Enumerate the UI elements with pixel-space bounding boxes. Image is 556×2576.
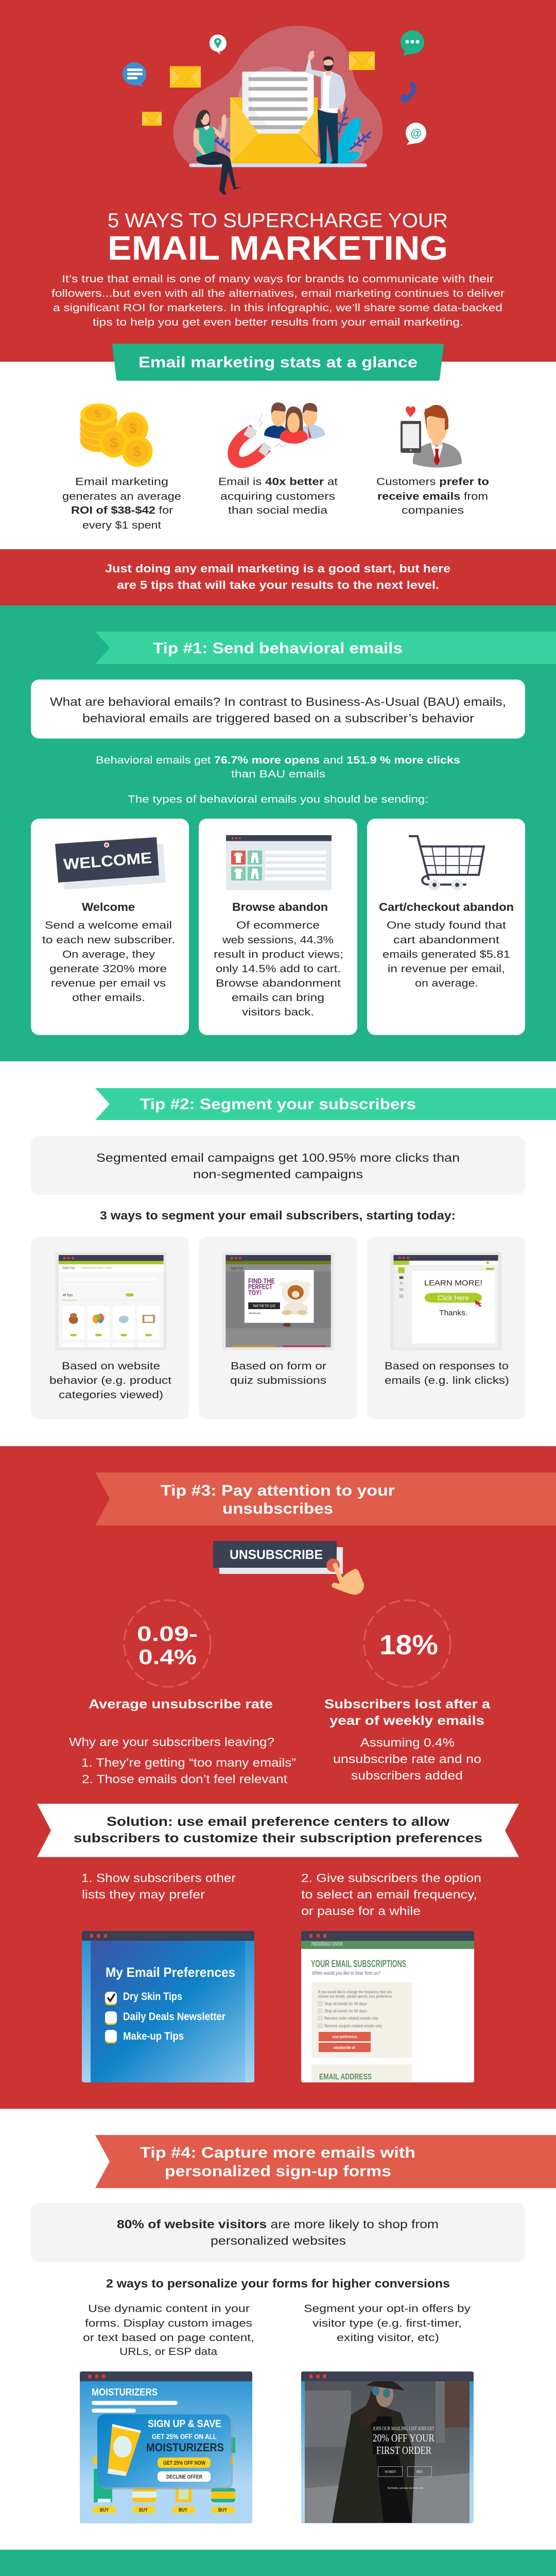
stat: prefer emails text: Customers prefer to	[376, 476, 489, 487]
checkbox: daily deals newsletter	[105, 2011, 225, 2025]
screenshot: quiz popup: Digioh Toys	[231, 1267, 243, 1270]
screenshot: fashion signup popup: WOMEN	[385, 2470, 396, 2474]
callout: what are behavioral emails	[31, 680, 525, 739]
text: dynamic content: or text based on page content,	[83, 2332, 254, 2344]
subheading: types of behavioral emails: The types of behavioral emails you should be sending:	[128, 794, 428, 805]
card body: web sessions, 44.3%	[222, 935, 334, 946]
callout: website visitors stat	[31, 2203, 525, 2262]
caption: quiz submissions	[230, 1375, 326, 1386]
stat: prefer emails text	[376, 476, 489, 516]
callout: segmented campaigns stat: Segmented email campaigns get 100.95% more clicks than	[96, 1151, 460, 1164]
stat: prefer emails text: companies	[402, 505, 464, 516]
text: segment opt-in offers: exiting visitor, etc)	[337, 2332, 439, 2344]
intro paragraph: tips to help you get even better results from your email marketing.	[93, 316, 463, 328]
icon: at-sign bubble: @	[410, 127, 422, 140]
card body: On average, they	[62, 949, 155, 960]
text: dynamic content	[83, 2303, 254, 2358]
card body: One study found that	[387, 920, 507, 931]
checkbox: dry skin tips	[105, 1991, 182, 2005]
text: segment opt-in offers	[304, 2303, 471, 2344]
panel: tip 3 background	[0, 1446, 556, 2109]
intro paragraph: It’s true that email is one of many ways for brands to communicate with their	[62, 273, 494, 285]
stat: ROI text: ROI of $38-$42 for	[71, 505, 173, 516]
icon: shopping cart	[409, 836, 484, 890]
ribbon: tip 3 heading: unsubscribes	[222, 1500, 333, 1517]
screenshot: moisturizers signup popup: MOISTURIZERS	[146, 2441, 224, 2454]
screenshot: your email subscriptions window: PREFERENCE CENTER	[311, 1941, 343, 1946]
icon: small envelope	[142, 112, 162, 126]
screenshot: moisturizers signup popup: MOISTURIZERS	[92, 2387, 158, 2398]
text: option 1	[81, 1871, 236, 1901]
stat label: subscribers lost: year of weekly emails	[329, 1714, 484, 1728]
caption: Based on form or	[231, 1361, 326, 1372]
card: cart/checkout abandon	[367, 819, 525, 1035]
panel: tip 1 background	[0, 605, 556, 1061]
screenshot: quiz popup	[222, 1252, 334, 1350]
screenshot: your email subscriptions window: Receive order related emails only	[324, 2015, 379, 2021]
ribbon: tip 1 heading: Tip #1: Send behavioral emails	[153, 640, 403, 657]
stat: 40x better text	[218, 476, 338, 516]
callout: segmented campaigns stat	[31, 1136, 525, 1195]
panel: stats background	[0, 362, 556, 549]
card body: in revenue per email,	[388, 963, 505, 975]
icon: blue chat bubble	[123, 62, 146, 87]
caption: emails (e.g. link clicks)	[385, 1375, 509, 1386]
heading tab: stats at a glance	[112, 344, 444, 381]
stat: 0.09-0.4% dashed circle: 0.4%	[138, 1645, 197, 1669]
icon: welcome sign	[55, 837, 166, 890]
intro paragraph: a significant ROI for marketers. In this infographic, we’ll share some data-backed	[53, 302, 502, 314]
card: email responses	[367, 1236, 525, 1419]
stat: ROI text	[62, 476, 181, 531]
stat: 40x better text: acquiring customers	[220, 491, 335, 502]
callout: website visitors stat: 80% of website visitors are more likely to shop from	[117, 2217, 439, 2231]
icon: location bubble	[210, 35, 227, 55]
subheading: 3 ways to segment: 3 ways to segment your email subscribers, starting today:	[100, 1209, 456, 1222]
card body: Send a welcome email	[45, 920, 172, 931]
icon: envelope top right	[349, 52, 375, 70]
icon: welcome sign: WELCOME	[63, 850, 152, 873]
screenshot: your email subscriptions window: receive our emails, please specify your preference.	[318, 1994, 393, 1999]
text: why subscribers leave: Why are your subscribers leaving?	[69, 1735, 274, 1749]
card: form or quiz submissions	[199, 1236, 357, 1419]
caption	[230, 1361, 326, 1386]
card title: Browse abandon	[232, 901, 328, 913]
stat: prefer emails text: receive emails from	[377, 491, 488, 502]
screenshot: moisturizers signup popup: SIGN UP & SAVE	[148, 2418, 221, 2430]
stat label: subscribers lost: Subscribers lost after a	[324, 1697, 491, 1711]
text: dynamic content: forms. Display custom images	[85, 2318, 252, 2329]
icon: gold coins: $	[93, 408, 103, 420]
stat: 0.09-0.4% dashed circle: 0.09-	[137, 1622, 198, 1646]
screenshot: your email subscriptions window: unsubscribe all	[334, 2045, 355, 2050]
screenshot: fashion signup popup: 20% OFF YOUR	[373, 2432, 435, 2444]
caption: behavior (e.g. product	[49, 1375, 172, 1386]
card: website behavior	[31, 1236, 189, 1419]
screenshot: fashion signup popup: JOIN OUR MAILING LIST AND GET	[373, 2426, 435, 2432]
stat: ROI text: every $1 spent	[82, 520, 162, 531]
screenshot: fashion signup popup: FIRST ORDER	[376, 2444, 431, 2456]
stat: ROI text: generates an average	[62, 491, 181, 502]
stat label: average unsubscribe rate: Average unsubscribe rate	[89, 1697, 273, 1711]
text: assumption	[333, 1736, 481, 1782]
ribbon: tip 4 heading: personalized sign-up forms	[165, 2163, 391, 2180]
screenshot: email with click button	[390, 1252, 501, 1350]
checkbox: make-up tips: Make-up Tips	[123, 2030, 184, 2042]
ribbon: tip 3 heading: Tip #3: Pay attention to your	[161, 1482, 395, 1499]
screenshot: your email subscriptions window: Stop all sends for 60 days	[324, 2008, 367, 2013]
stat: 40x better text: than social media	[228, 505, 328, 516]
card title: Cart/checkout abandon	[379, 901, 514, 913]
heading tab: stats at a glance: Email marketing stats at a glance	[138, 354, 418, 371]
panel: tip 5 background	[0, 2550, 556, 2576]
checkbox: dry skin tips: Dry Skin Tips	[123, 1991, 182, 2003]
screenshot: my email preferences window	[82, 1931, 254, 2082]
intro paragraph	[51, 273, 505, 328]
subheading: 2 ways to personalize: 2 ways to personalize your forms for higher conversions	[106, 2277, 450, 2290]
stat: 18% dashed circle	[364, 1600, 450, 1687]
card body: emails can bring	[232, 992, 324, 1004]
text: assumption: Assuming 0.4%	[360, 1736, 455, 1749]
screenshot: fashion signup popup	[301, 2371, 474, 2523]
screenshot: moisturizers signup popup: BUY	[179, 2507, 187, 2513]
icon: man with phone and heart	[401, 405, 462, 468]
caption: Based on website	[62, 1361, 160, 1372]
card body: on average.	[415, 978, 478, 989]
icon: gold coins: $	[133, 444, 141, 460]
text: dynamic content: URLs, or ESP data	[119, 2346, 218, 2358]
banner: solution	[37, 1804, 519, 1857]
screenshot: your email subscriptions window: If you would like to change the frequency that you	[318, 1989, 392, 1994]
card body	[214, 920, 343, 1018]
card body: Browse abandonment	[216, 978, 341, 989]
screenshot: quiz popup: TOY!	[248, 1288, 262, 1296]
screenshot: my email preferences window: My Email Preferences	[106, 1964, 235, 1980]
ribbon: tip 2 heading	[95, 1088, 556, 1120]
screenshot: your email subscriptions window: When would you like to hear from us?	[312, 1971, 380, 1976]
card body: revenue per email vs	[51, 978, 166, 989]
screenshot: moisturizers signup popup: BUY	[100, 2507, 109, 2513]
card body: Of ecommerce	[236, 920, 320, 931]
icon: gold coins	[80, 403, 152, 467]
checkbox: daily deals newsletter: Daily Deals Newsletter	[123, 2011, 225, 2023]
card body	[383, 920, 510, 989]
card title: Welcome	[82, 901, 135, 913]
icon: at-sign bubble	[406, 123, 426, 145]
ribbon: tip 1 heading	[95, 632, 556, 664]
icon: unsubscribe button with hand	[213, 1541, 364, 1595]
callout: website visitors stat: personalized websites	[211, 2234, 346, 2247]
panel: hero background	[0, 0, 556, 362]
screenshot: quiz popup: FIND THE	[248, 1277, 275, 1285]
icon: telephone	[401, 81, 416, 103]
screenshot: moisturizers signup popup: DECLINE OFFER	[166, 2474, 202, 2480]
screenshot: toy store page: All Toys	[63, 1294, 73, 1297]
callout: what are behavioral emails: What are behavioral emails? In contrast to Business-As-Usual (BAU) emails,	[50, 695, 506, 708]
checkbox: make-up tips	[105, 2030, 184, 2043]
icon: magnet attracting people	[233, 402, 325, 463]
title: EMAIL MARKETING	[108, 229, 448, 267]
icon: gold coins: $	[110, 435, 118, 451]
ribbon: tip 4 heading	[95, 2135, 556, 2188]
screenshot: quiz popup: PERFECT	[248, 1282, 272, 1291]
card: browse abandon	[199, 819, 357, 1035]
screenshot: email with click button: Click Here	[438, 1294, 469, 1302]
screenshot: your email subscriptions window: YOUR EMAIL SUBSCRIPTIONS	[311, 1959, 406, 1970]
caption: categories viewed)	[59, 1389, 163, 1401]
text: why subscribers leave	[69, 1735, 296, 1786]
text: assumption: unsubscribe rate and no	[333, 1752, 481, 1766]
text: segment opt-in offers: visitor type (e.g. first-timer,	[312, 2318, 462, 2329]
screenshot: your email subscriptions window: EMAIL ADDRESS	[319, 2073, 372, 2081]
screenshot: your email subscriptions window: save preferences	[332, 2035, 357, 2039]
screenshot: toy store page: Catalog Delivery About Contact	[81, 1267, 112, 1269]
ribbon: tip 4 heading: Tip #4: Capture more emails with	[140, 2144, 415, 2161]
card body: generate 320% more	[49, 963, 167, 975]
stat: 0.09-0.4% dashed circle	[124, 1600, 211, 1687]
screenshot: moisturizers signup popup: GET 25% OFF ON ALL	[152, 2432, 217, 2441]
stat: ROI text: Email marketing	[75, 476, 168, 487]
screenshot: fashion signup popup: No thanks, just take me to the site.	[388, 2487, 424, 2490]
card body: visitors back.	[242, 1007, 314, 1018]
card body: only 14.5% add to cart.	[216, 963, 341, 975]
text: option 2: or pause for a while	[301, 1904, 421, 1918]
ribbon: tip 2 heading: Tip #2: Segment your subscribers	[140, 1096, 416, 1113]
screenshot: moisturizers signup popup: GET 25% OFF NOW	[163, 2460, 205, 2466]
card: welcome	[31, 819, 189, 1035]
card body	[42, 920, 175, 1004]
icon: unsubscribe button with hand: UNSUBSCRIBE	[230, 1548, 323, 1562]
stat text: opens and clicks: than BAU emails	[231, 769, 325, 780]
icon: envelope left	[170, 66, 201, 88]
card body: result in product views;	[214, 949, 343, 960]
screenshot: email with click button: Thanks.	[439, 1309, 467, 1317]
text: option 2: 2. Give subscribers the option	[301, 1871, 481, 1885]
stat label: subscribers lost	[324, 1697, 491, 1728]
text: why subscribers leave: 1. They’re getting “too many emails”	[81, 1756, 296, 1769]
screenshot: moisturizers signup popup	[80, 2371, 252, 2523]
stat text: opens and clicks: Behavioral emails get 76.7% more opens and 151.9 % more clicks	[96, 755, 460, 766]
text: option 1: 1. Show subscribers other	[81, 1871, 236, 1885]
panel: transition strip	[0, 549, 556, 605]
callout: segmented campaigns stat: non-segmented campaigns	[193, 1167, 363, 1181]
text: option 1: lists they may prefer	[82, 1888, 205, 1901]
banner: solution: Solution: use email preference centers to allow	[107, 1815, 450, 1829]
text: option 2: to select an email frequency,	[301, 1888, 477, 1901]
screenshot: toy store page: Digioh Toys	[63, 1266, 76, 1270]
screenshot: quiz popup: TAKE THE TOY QUIZ	[253, 1304, 275, 1308]
banner: solution: subscribers to customize their subscription preferences	[74, 1831, 482, 1845]
screenshot: your email subscriptions window: Receive coupon related emails only	[324, 2023, 383, 2028]
text: assumption: subscribers added	[351, 1769, 463, 1782]
title	[108, 210, 448, 267]
ribbon: tip 3 heading	[95, 1472, 556, 1526]
screenshot: quiz popup: Skip this quiz	[249, 1312, 260, 1314]
screenshot: fashion signup popup: MEN	[416, 2470, 423, 2474]
screenshot: your email subscriptions window	[301, 1931, 474, 2082]
screenshot: moisturizers signup popup: BUY	[139, 2507, 148, 2513]
stat text: opens and clicks	[96, 755, 460, 780]
panel: transition strip: Just doing any email marketing is a good start, but here	[105, 562, 450, 575]
illustration: hero email scene	[173, 26, 383, 194]
text: option 2	[301, 1871, 481, 1918]
caption	[49, 1361, 172, 1401]
stat: 18% dashed circle: 18%	[379, 1630, 438, 1660]
intro paragraph: followers...but even with all the alternatives, email marketing continues to deliver	[51, 287, 505, 299]
icon: green chat bubble	[401, 30, 424, 56]
text: dynamic content: Use dynamic content in your	[88, 2303, 250, 2314]
panel: transition strip: are 5 tips that will take your results to the next level.	[117, 579, 439, 591]
callout: what are behavioral emails: behavioral emails are triggered based on a subscriber’s behavior	[82, 711, 474, 725]
title: 5 WAYS TO SUPERCHARGE YOUR	[108, 210, 448, 232]
card body: cart abandonment	[393, 935, 500, 946]
stat: 40x better text: Email is 40x better at	[218, 476, 338, 487]
screenshot: toy store page	[55, 1252, 166, 1350]
screenshot: your email subscriptions window: Stop all sends for 30 days	[324, 2001, 367, 2006]
card body: to each new subscriber.	[42, 935, 175, 946]
screenshot: email with click button: LEARN MORE!	[424, 1279, 482, 1287]
card body: emails generated $5.81	[383, 949, 510, 960]
text: why subscribers leave: 2. Those emails don’t feel relevant	[82, 1772, 288, 1786]
card body: other emails.	[72, 992, 145, 1004]
icon: gold coins: $	[129, 420, 137, 436]
text: segment opt-in offers: Segment your opt-in offers by	[304, 2303, 471, 2314]
icon: product browser window	[226, 835, 332, 890]
caption	[385, 1361, 509, 1386]
caption: Based on responses to	[385, 1361, 509, 1372]
screenshot: moisturizers signup popup: BUY	[218, 2507, 227, 2513]
